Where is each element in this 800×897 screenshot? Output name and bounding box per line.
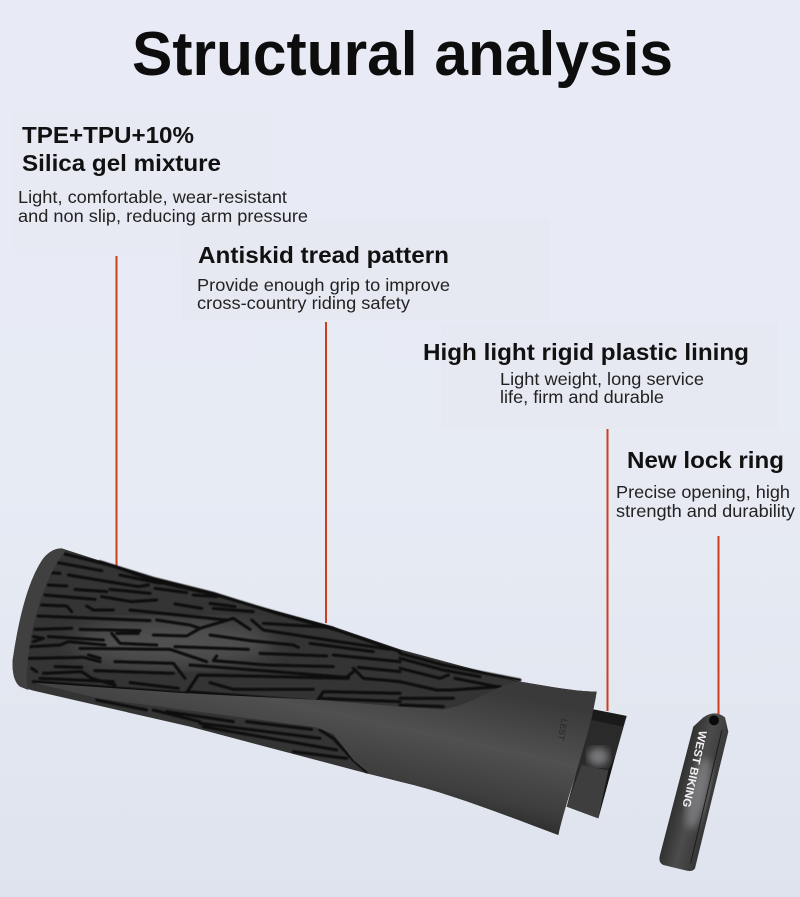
heading: material: TPE+TPU+10%: [22, 122, 194, 148]
ring logo text: WEST BIKING: [679, 729, 708, 809]
imprint: LEST: [556, 718, 570, 742]
text block: material: and non slip, reducing arm pressure: [18, 206, 308, 226]
text block: material: [18, 122, 308, 226]
description: material: Light, comfortable, wear-resistant: [18, 187, 287, 207]
text block: lining: [423, 339, 749, 407]
lock ring: [659, 713, 728, 871]
panel: lock ring: [612, 433, 800, 536]
panel: material: [13, 112, 271, 255]
grip outline: [13, 548, 597, 835]
plastic lining: [567, 709, 627, 818]
leader line: material: [116, 256, 118, 566]
smooth body section: [33, 682, 597, 835]
heading: lock ring: New lock ring: [627, 447, 784, 473]
description: tread: Provide enough grip to improve: [197, 275, 450, 295]
text block: lining: life, firm and durable: [500, 387, 664, 407]
tread grooves: [28, 554, 520, 772]
leader line: lining: [606, 429, 608, 711]
grip illustration: [13, 548, 728, 871]
text block: tread: cross-country riding safety: [197, 293, 410, 313]
heading: tread: Antiskid tread pattern: [198, 242, 449, 268]
grip body with tread pattern: [13, 548, 597, 835]
title: Structural analysis: [132, 20, 673, 89]
text block: tread: [197, 242, 450, 313]
panel: lining: [441, 322, 778, 429]
heading: lining: High light rigid plastic lining: [423, 339, 749, 365]
leader line: lock ring: [718, 536, 720, 714]
tread sheen: [73, 620, 273, 667]
panel: tread: [181, 219, 550, 320]
text block: lock ring: strength and durability: [616, 501, 795, 521]
end cap: [13, 548, 65, 690]
text block: lock ring: [616, 447, 795, 521]
leader line: tread: [325, 322, 327, 623]
description: lining: Light weight, long service: [500, 369, 704, 389]
description: lock ring: Precise opening, high: [616, 482, 790, 502]
text block: material: Silica gel mixture: [22, 150, 221, 176]
